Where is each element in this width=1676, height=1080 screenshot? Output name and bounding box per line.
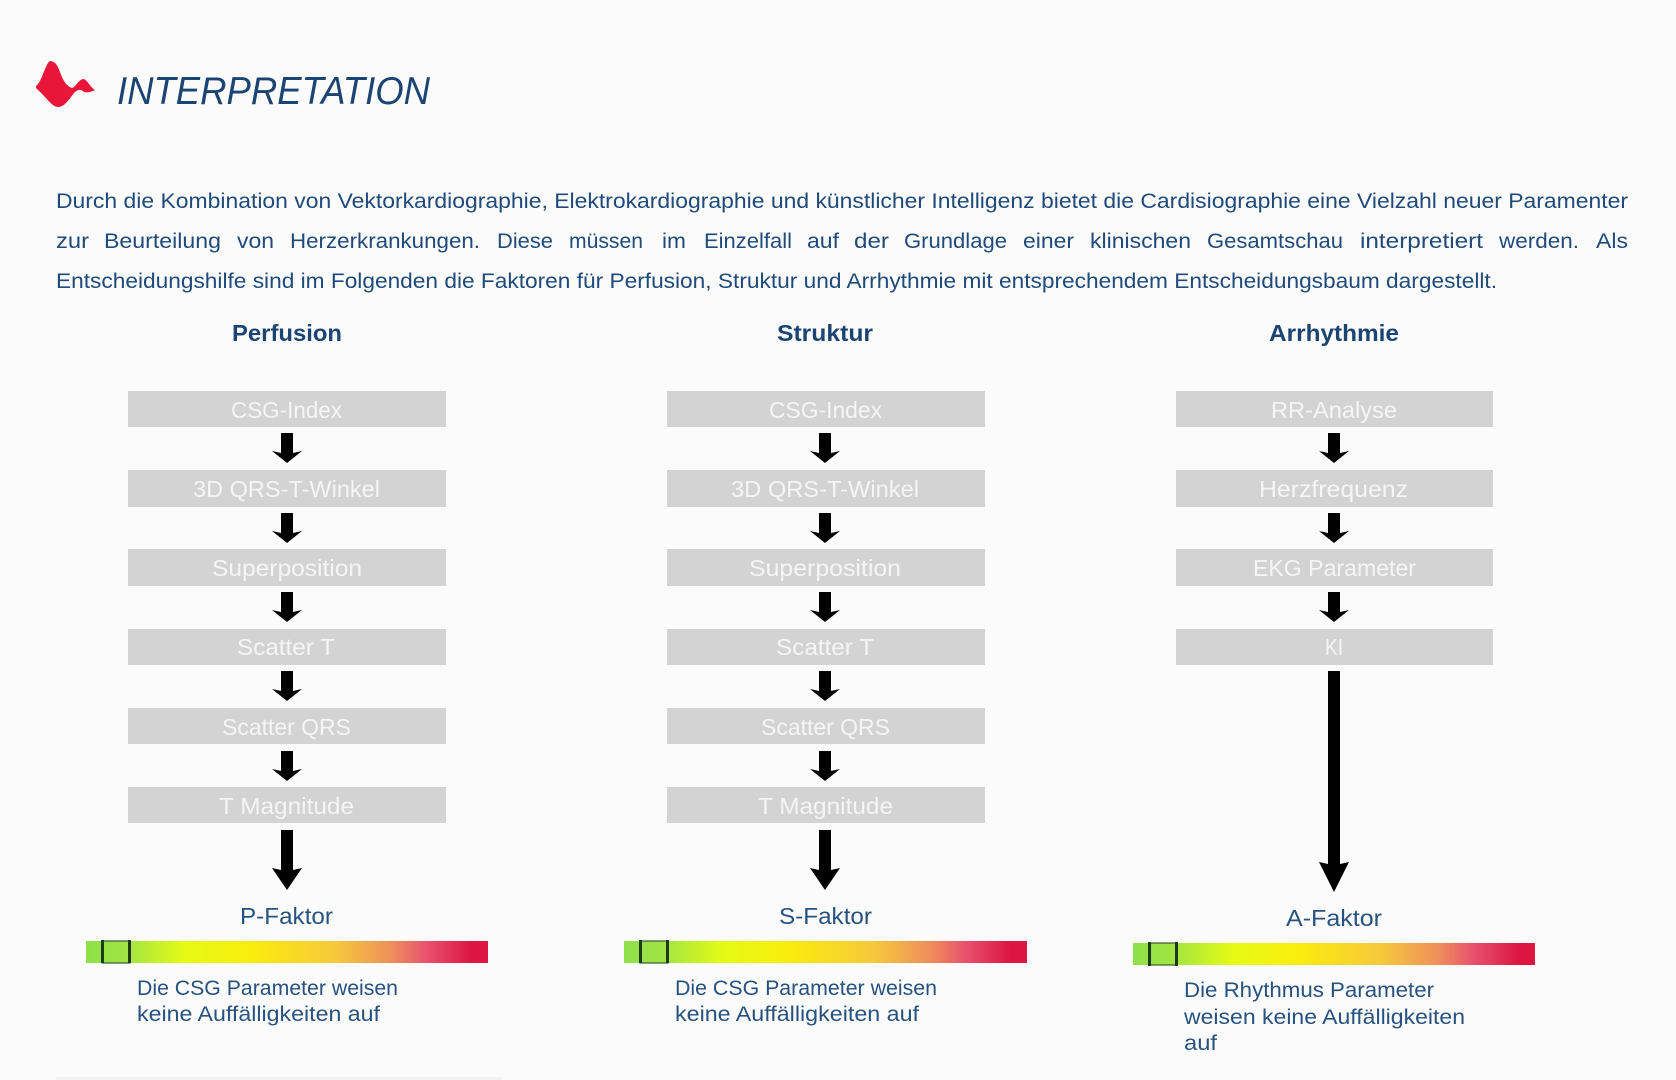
- step: CSG-Index: CSG-Index: [769, 397, 882, 423]
- intro paragraph: Als: [1596, 230, 1628, 253]
- intro paragraph: Grundlage: [904, 230, 1007, 253]
- intro paragraph: Entscheidungshilfe sind im Folgenden die Faktoren für Perfusion, Struktur und Arrhythmie mit entsprechendem Entscheidungsbaum dargestellt.: [56, 270, 1497, 293]
- intro paragraph: der: [854, 230, 889, 253]
- arrow: [272, 433, 302, 463]
- factor label: A-Faktor: A-Faktor: [1286, 905, 1382, 931]
- arrow: [1319, 513, 1349, 543]
- step: Scatter QRS: [667, 708, 985, 744]
- intro paragraph: klinischen: [1090, 230, 1191, 253]
- step: Superposition: Superposition: [749, 555, 901, 581]
- intro paragraph: von: [237, 230, 274, 253]
- intro paragraph: einer: [1023, 230, 1074, 253]
- intro paragraph: [56, 190, 1628, 293]
- intro paragraph: interpretiert: [1360, 230, 1483, 253]
- step: KI: KI: [1325, 634, 1343, 660]
- long arrow: [1319, 671, 1349, 892]
- step: Herzfrequenz: Herzfrequenz: [1259, 476, 1408, 502]
- factor label: S-Faktor: S-Faktor: [779, 903, 872, 929]
- header: [36, 61, 431, 113]
- intro paragraph: auf: [807, 230, 839, 253]
- description: keine Auffälligkeiten auf: [675, 1003, 919, 1026]
- step: RR-Analyse: RR-Analyse: [1271, 397, 1397, 423]
- heading: Perfusion: Perfusion: [232, 320, 342, 346]
- intro paragraph: Durch die Kombination von Vektorkardiographie, Elektrokardiographie und künstlicher Intelligenz bietet die Cardisiographie eine Vielzahl neuer Paramenter: [56, 190, 1628, 213]
- step: Superposition: [667, 549, 985, 586]
- description: Die Rhythmus Parameter: [1184, 979, 1434, 1002]
- step: CSG-Index: [667, 391, 985, 427]
- step: RR-Analyse: [1176, 391, 1493, 427]
- panel: Perfusion: [86, 320, 488, 1026]
- step: 3D QRS-T-Winkel: [128, 470, 446, 507]
- description: [1183, 979, 1465, 1055]
- step: KI: [1176, 629, 1493, 665]
- panel: Struktur: [624, 320, 1027, 1026]
- intro paragraph: Einzelfall: [704, 230, 792, 253]
- gradient scale with marker: [86, 940, 488, 963]
- step: CSG-Index: [128, 391, 446, 427]
- step: Scatter QRS: [128, 708, 446, 744]
- arrow: [810, 513, 840, 543]
- step: Scatter T: Scatter T: [237, 634, 335, 660]
- arrow: [272, 513, 302, 543]
- arrow: [272, 671, 302, 701]
- description: [675, 977, 937, 1026]
- title: INTERPRETATION: [117, 70, 431, 113]
- arrow: [810, 433, 840, 463]
- arrow: [272, 751, 302, 781]
- intro paragraph: werden.: [1498, 230, 1579, 253]
- intro paragraph: Beurteilung: [104, 230, 221, 253]
- description: [137, 977, 398, 1026]
- step: T Magnitude: [667, 787, 985, 823]
- step: Scatter QRS: Scatter QRS: [761, 714, 890, 740]
- arrow: [1319, 592, 1349, 622]
- step: T Magnitude: T Magnitude: [758, 793, 893, 819]
- panel: Arrhythmie: [1133, 320, 1535, 1055]
- step: Superposition: [128, 549, 446, 586]
- step: Herzfrequenz: [1176, 470, 1493, 507]
- intro paragraph: müssen: [569, 230, 643, 253]
- intro paragraph: zur: [56, 230, 89, 253]
- gradient scale with marker: [1133, 942, 1535, 966]
- description: weisen keine Auffälligkeiten: [1183, 1006, 1465, 1029]
- step: Scatter QRS: Scatter QRS: [222, 714, 351, 740]
- description: Die CSG Parameter weisen: [137, 977, 398, 1000]
- heading: Struktur: Struktur: [777, 320, 873, 346]
- arrow: [272, 592, 302, 622]
- gradient scale with marker: [624, 940, 1027, 963]
- intro paragraph: Gesamtschau: [1207, 230, 1343, 253]
- heading: Arrhythmie: Arrhythmie: [1269, 320, 1399, 346]
- step: Scatter T: Scatter T: [776, 634, 874, 660]
- step: Superposition: Superposition: [212, 555, 362, 581]
- step: EKG Parameter: EKG Parameter: [1253, 555, 1416, 581]
- cut-off footer text line: [56, 1077, 502, 1080]
- arrow: [1319, 433, 1349, 463]
- description: keine Auffälligkeiten auf: [137, 1003, 380, 1026]
- step: Scatter T: [128, 629, 446, 665]
- arrow: [272, 830, 302, 890]
- step: 3D QRS-T-Winkel: 3D QRS-T-Winkel: [731, 476, 919, 502]
- intro paragraph: Herzerkrankungen.: [290, 230, 480, 253]
- arrow: [810, 751, 840, 781]
- description: auf: [1184, 1032, 1217, 1055]
- step: 3D QRS-T-Winkel: [667, 470, 985, 507]
- icon: red waveform logo: [36, 61, 95, 107]
- step: 3D QRS-T-Winkel: 3D QRS-T-Winkel: [193, 476, 380, 502]
- step: T Magnitude: T Magnitude: [219, 793, 354, 819]
- arrow: [810, 830, 840, 890]
- step: CSG-Index: CSG-Index: [231, 397, 342, 423]
- description: Die CSG Parameter weisen: [675, 977, 937, 1000]
- intro paragraph: Diese: [497, 230, 553, 253]
- factor label: P-Faktor: P-Faktor: [240, 903, 333, 929]
- arrow: [810, 671, 840, 701]
- step: EKG Parameter: [1176, 549, 1493, 586]
- intro paragraph: im: [662, 230, 686, 253]
- step: T Magnitude: [128, 787, 446, 823]
- step: Scatter T: [667, 629, 985, 665]
- arrow: [810, 592, 840, 622]
